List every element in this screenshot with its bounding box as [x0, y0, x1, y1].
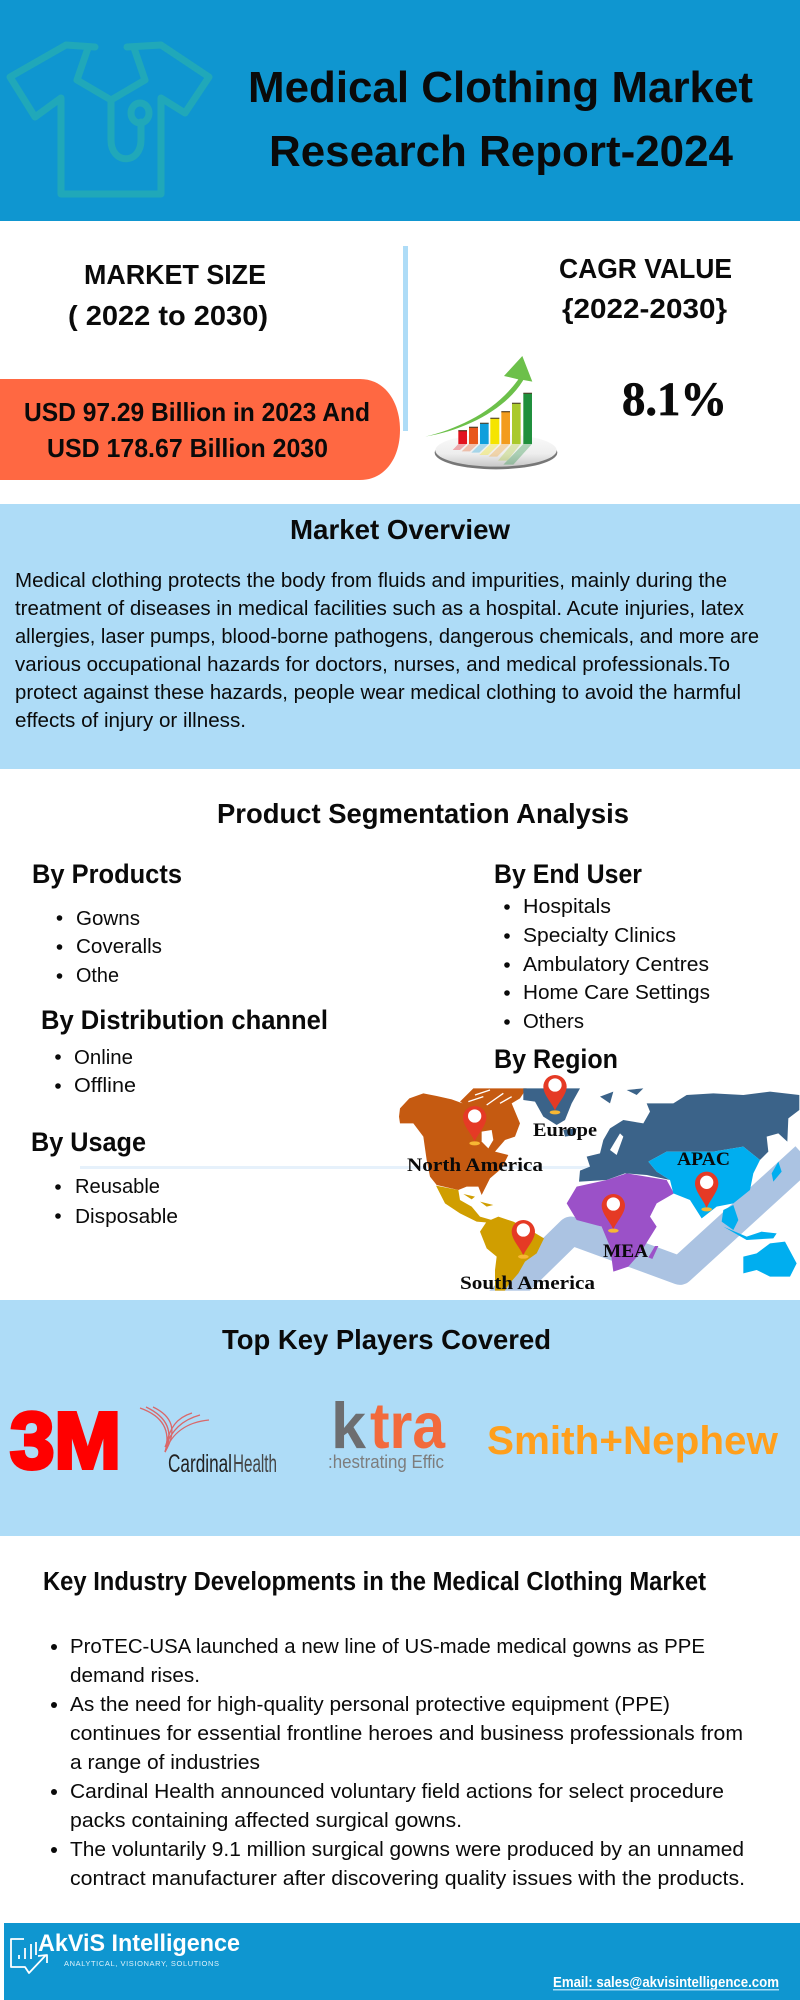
panel: by usage: By Usage — [31, 1127, 146, 1157]
text block: overview paragraph: treatment of diseases in medical facilities such as a hospital. Acute injuries, latex — [15, 597, 745, 620]
panel: by products: Othe — [76, 964, 119, 987]
list: developments: Cardinal Health announced voluntary field actions for select procedure — [70, 1780, 724, 1803]
panel: by usage: Reusable — [75, 1175, 160, 1198]
panel: by region — [399, 1044, 800, 1311]
title: Medical Clothing Market — [248, 63, 753, 112]
panel: by end user: Specialty Clinics — [523, 924, 676, 947]
panel: by products: Gowns — [76, 907, 140, 930]
list: developments: ProTEC-USA launched a new line of US-made medical gowns as PPE — [70, 1635, 705, 1658]
heading: CAGR value — [559, 253, 732, 324]
panel: by products: By Products — [32, 859, 182, 889]
panel: by end user: Others — [523, 1010, 584, 1033]
panel: by products — [32, 859, 182, 987]
icon: AkViS logo mark — [11, 1939, 47, 1973]
panel: by usage: Disposable — [75, 1205, 178, 1228]
callout: market size value: USD 97.29 Billion in 2023 And — [24, 397, 370, 427]
title — [248, 63, 753, 176]
icon: shirt with stethoscope — [10, 45, 209, 194]
logo: Smith+Nephew: Smith+Nephew — [487, 1419, 779, 1463]
heading: market size: ( 2022 to 2030) — [68, 300, 268, 331]
panel: by end user: Hospitals — [523, 895, 611, 918]
logo text: AkViS Intelligence: AkViS Intelligence — [38, 1930, 240, 1957]
callout: market size value — [0, 379, 400, 480]
marker: North America — [463, 1106, 486, 1145]
label: North America: North America — [407, 1155, 544, 1176]
panel: by distribution channel: Offline — [74, 1074, 136, 1097]
logo: ktra: tra — [370, 1389, 446, 1462]
panel: by end user: By End User — [494, 859, 642, 889]
logo: ktra: k — [331, 1389, 367, 1462]
panel: by distribution channel: By Distribution channel — [41, 1005, 328, 1035]
list: developments — [51, 1635, 745, 1890]
heading: key industry developments: Key Industry Developments in the Medical Clothing Market — [43, 1568, 706, 1596]
heading: CAGR value: {2022-2030} — [562, 293, 727, 324]
text block: overview paragraph — [15, 569, 759, 732]
panel: header — [0, 0, 800, 221]
marker: Europe — [543, 1075, 567, 1114]
panel: footer — [4, 1923, 800, 2000]
text block: overview paragraph: effects of injury or illness. — [15, 709, 246, 732]
panel: market overview — [0, 504, 800, 769]
logo: ktra — [328, 1389, 446, 1472]
list: developments: demand rises. — [70, 1664, 200, 1687]
list: developments: a range of industries — [70, 1751, 260, 1774]
statistic: CAGR 8.1%: 8.1% — [622, 373, 727, 426]
logo: Cardinal Health: Health — [233, 1450, 277, 1478]
text block: overview paragraph: various occupational hazards for doctors, nurses, and medical professionals.To — [15, 653, 730, 676]
label: MEA: MEA — [603, 1241, 648, 1262]
label: South America: South America — [460, 1273, 596, 1294]
marker: APAC — [695, 1172, 718, 1211]
contact email: Email: sales@akvisintelligence.com — [553, 1975, 779, 1991]
heading: market overview: Market Overview — [290, 514, 510, 545]
world map — [399, 1075, 800, 1311]
label: Europe: Europe — [533, 1120, 597, 1141]
panel: by distribution channel — [41, 1005, 328, 1097]
heading: by region: By Region — [494, 1044, 618, 1074]
heading: product segmentation analysis: Product Segmentation Analysis — [217, 798, 629, 829]
heading: market size — [68, 259, 268, 331]
list: developments: packs containing affected surgical gowns. — [70, 1809, 462, 1832]
text block: overview paragraph: protect against these hazards, people wear medical clothing to avoid the harmful — [15, 681, 741, 704]
list: developments: contract manufacturer after discovering quality issues with the products. — [70, 1867, 745, 1890]
panel: top key players — [0, 1300, 800, 1536]
list: developments: As the need for high-quality personal protective equipment (PPE) — [70, 1693, 670, 1716]
callout: market size value: USD 178.67 Billion 2030 — [47, 433, 328, 463]
heading: market size: MARKET SIZE — [84, 259, 266, 290]
list: developments: continues for essential frontline heroes and business professionals from — [70, 1722, 743, 1745]
list: developments: The voluntarily 9.1 million surgical gowns were produced by an unnamed — [70, 1838, 744, 1861]
logo: 3M: 3M — [10, 1396, 121, 1485]
text block: overview paragraph: allergies, laser pumps, blood-borne pathogens, dangerous chemicals, and more are — [15, 625, 759, 648]
logo: Cardinal Health — [140, 1407, 277, 1478]
panel: key industry developments — [43, 1568, 745, 1890]
marker: MEA — [602, 1194, 625, 1233]
heading: CAGR value: CAGR VALUE — [559, 253, 732, 284]
panel: by distribution channel: Online — [74, 1046, 133, 1069]
panel: by products: Coveralls — [76, 935, 162, 958]
logo text: AkViS Intelligence: ANALYTICAL, VISIONARY, SOLUTIONS — [64, 1959, 219, 1968]
panel: by end user: Home Care Settings — [523, 981, 710, 1004]
logo text: AkViS Intelligence — [38, 1930, 240, 1968]
logo: Cardinal Health: Cardinal — [168, 1450, 232, 1478]
text block: overview paragraph: Medical clothing protects the body from fluids and impurities, mainly during the — [15, 569, 727, 592]
heading: top key players covered: Top Key Players Covered — [222, 1324, 551, 1355]
panel: CAGR — [425, 253, 732, 469]
panel: by end user — [494, 859, 710, 1033]
icon: growth bar chart — [425, 356, 557, 469]
logo: ktra: :hestrating Effic — [328, 1452, 444, 1472]
panel: by usage — [31, 1127, 178, 1228]
panel: by end user: Ambulatory Centres — [523, 953, 709, 976]
title: Research Report-2024 — [269, 127, 734, 176]
marker: South America — [512, 1220, 535, 1259]
panel: market size — [0, 259, 400, 480]
label: APAC: APAC — [677, 1149, 730, 1170]
